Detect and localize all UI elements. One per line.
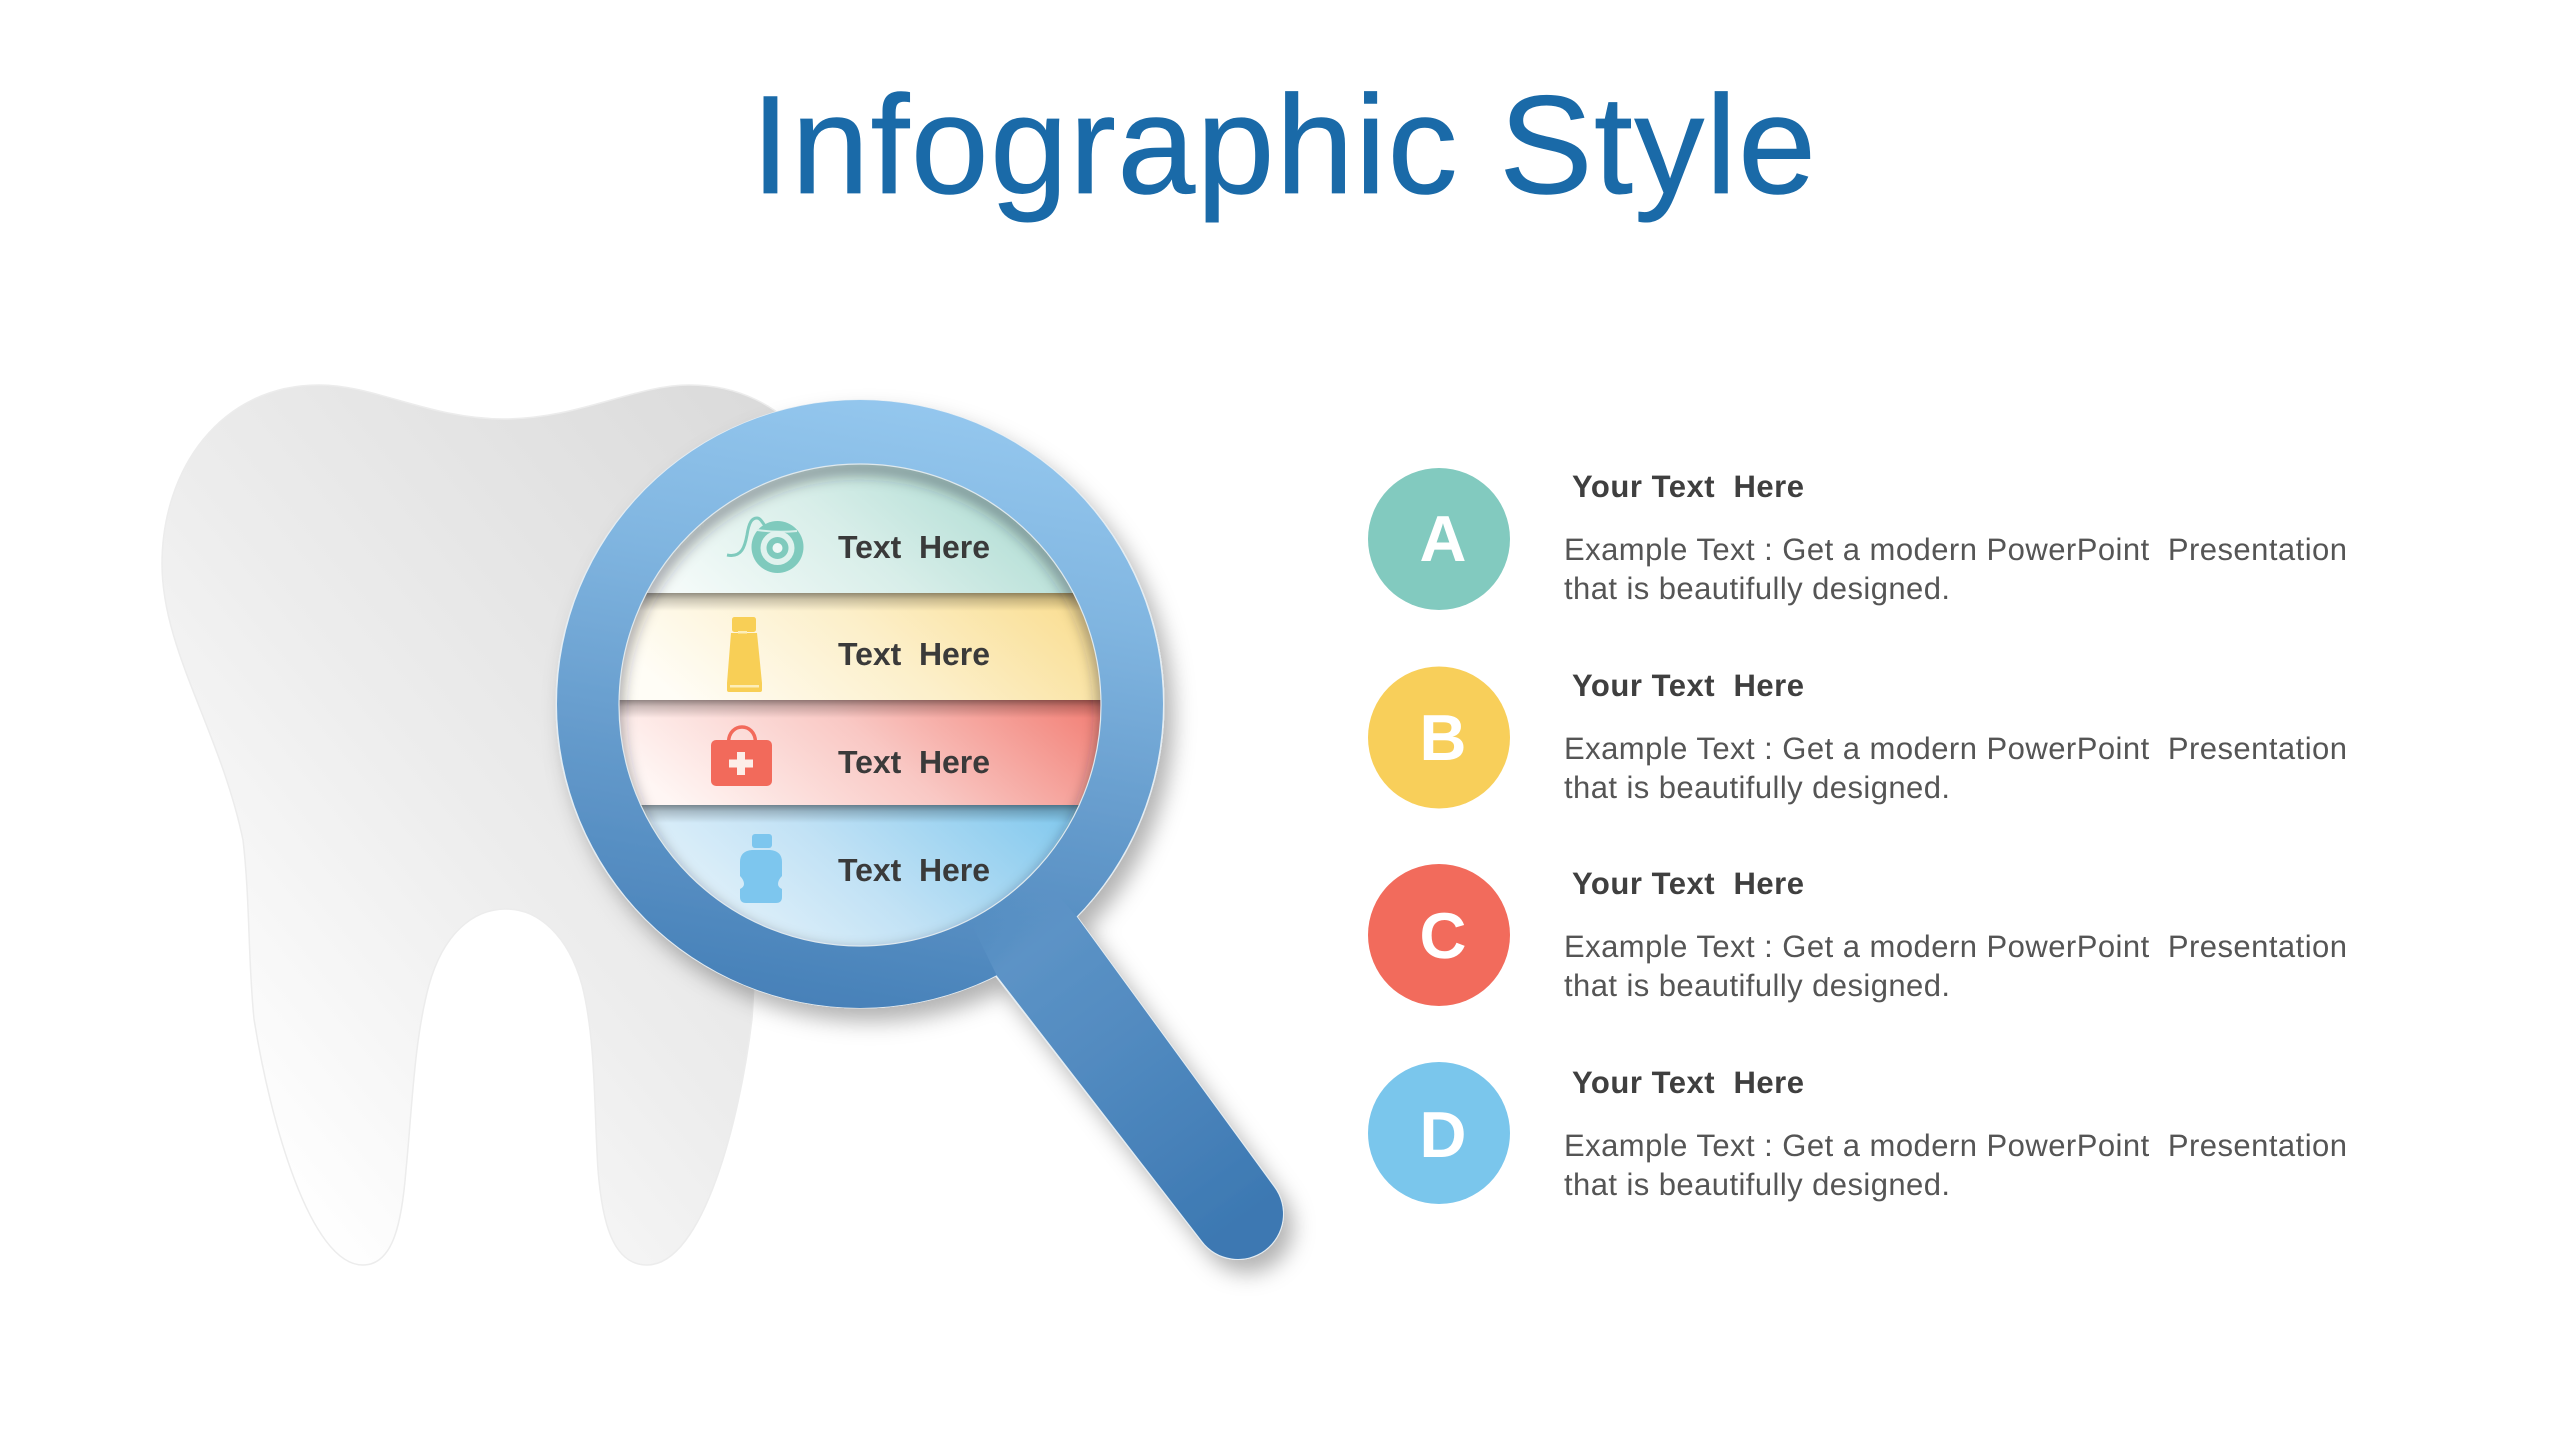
lens window <box>610 460 1110 958</box>
badge B <box>1368 666 1510 808</box>
body C: Example Text : Get a modern PowerPoint Presentation <box>1564 929 2347 964</box>
body C: that is beautifully designed. <box>1564 968 1950 1003</box>
heading A: Your Text Here <box>1572 469 1804 504</box>
band: teal <box>647 464 1072 593</box>
title: Infographic Style <box>751 66 1816 223</box>
icon: blue mouthwash bottle <box>740 834 782 903</box>
letter D: D <box>1420 1098 1466 1171</box>
letter C: C <box>1420 899 1466 972</box>
body B: Example Text : Get a modern PowerPoint Presentation <box>1564 731 2347 766</box>
lens label 2: Text Here <box>838 636 990 672</box>
heading D: Your Text Here <box>1572 1065 1804 1100</box>
icon: red first aid kit <box>711 727 772 786</box>
heading B: Your Text Here <box>1572 668 1804 703</box>
heading C: Your Text Here <box>1572 866 1804 901</box>
body B: that is beautifully designed. <box>1564 770 1950 805</box>
icon: yellow bottle <box>727 617 762 692</box>
band: blue <box>642 805 1078 946</box>
band: yellow <box>610 593 1110 701</box>
tooth silhouette <box>162 385 846 1265</box>
item A <box>1368 468 2347 610</box>
badge A <box>1368 468 1510 610</box>
item C <box>1368 864 2347 1006</box>
item B <box>1368 666 2347 808</box>
lens label 3: Text Here <box>838 744 990 780</box>
magnifier body: ring and handle <box>556 400 1283 1259</box>
badge D <box>1368 1062 1510 1204</box>
letter A: A <box>1420 502 1466 575</box>
magnifying glass <box>556 400 1283 1259</box>
item D <box>1368 1062 2347 1204</box>
badge C <box>1368 864 1510 1006</box>
band: red <box>610 700 1110 806</box>
lens label 1: Text Here <box>838 529 990 565</box>
body D: that is beautifully designed. <box>1564 1167 1950 1202</box>
letter B: B <box>1420 701 1466 774</box>
body D: Example Text : Get a modern PowerPoint Presentation <box>1564 1128 2347 1163</box>
lens label 4: Text Here <box>838 852 990 888</box>
body A: that is beautifully designed. <box>1564 571 1950 606</box>
icon: floss <box>727 518 804 573</box>
body A: Example Text : Get a modern PowerPoint Presentation <box>1564 532 2347 567</box>
